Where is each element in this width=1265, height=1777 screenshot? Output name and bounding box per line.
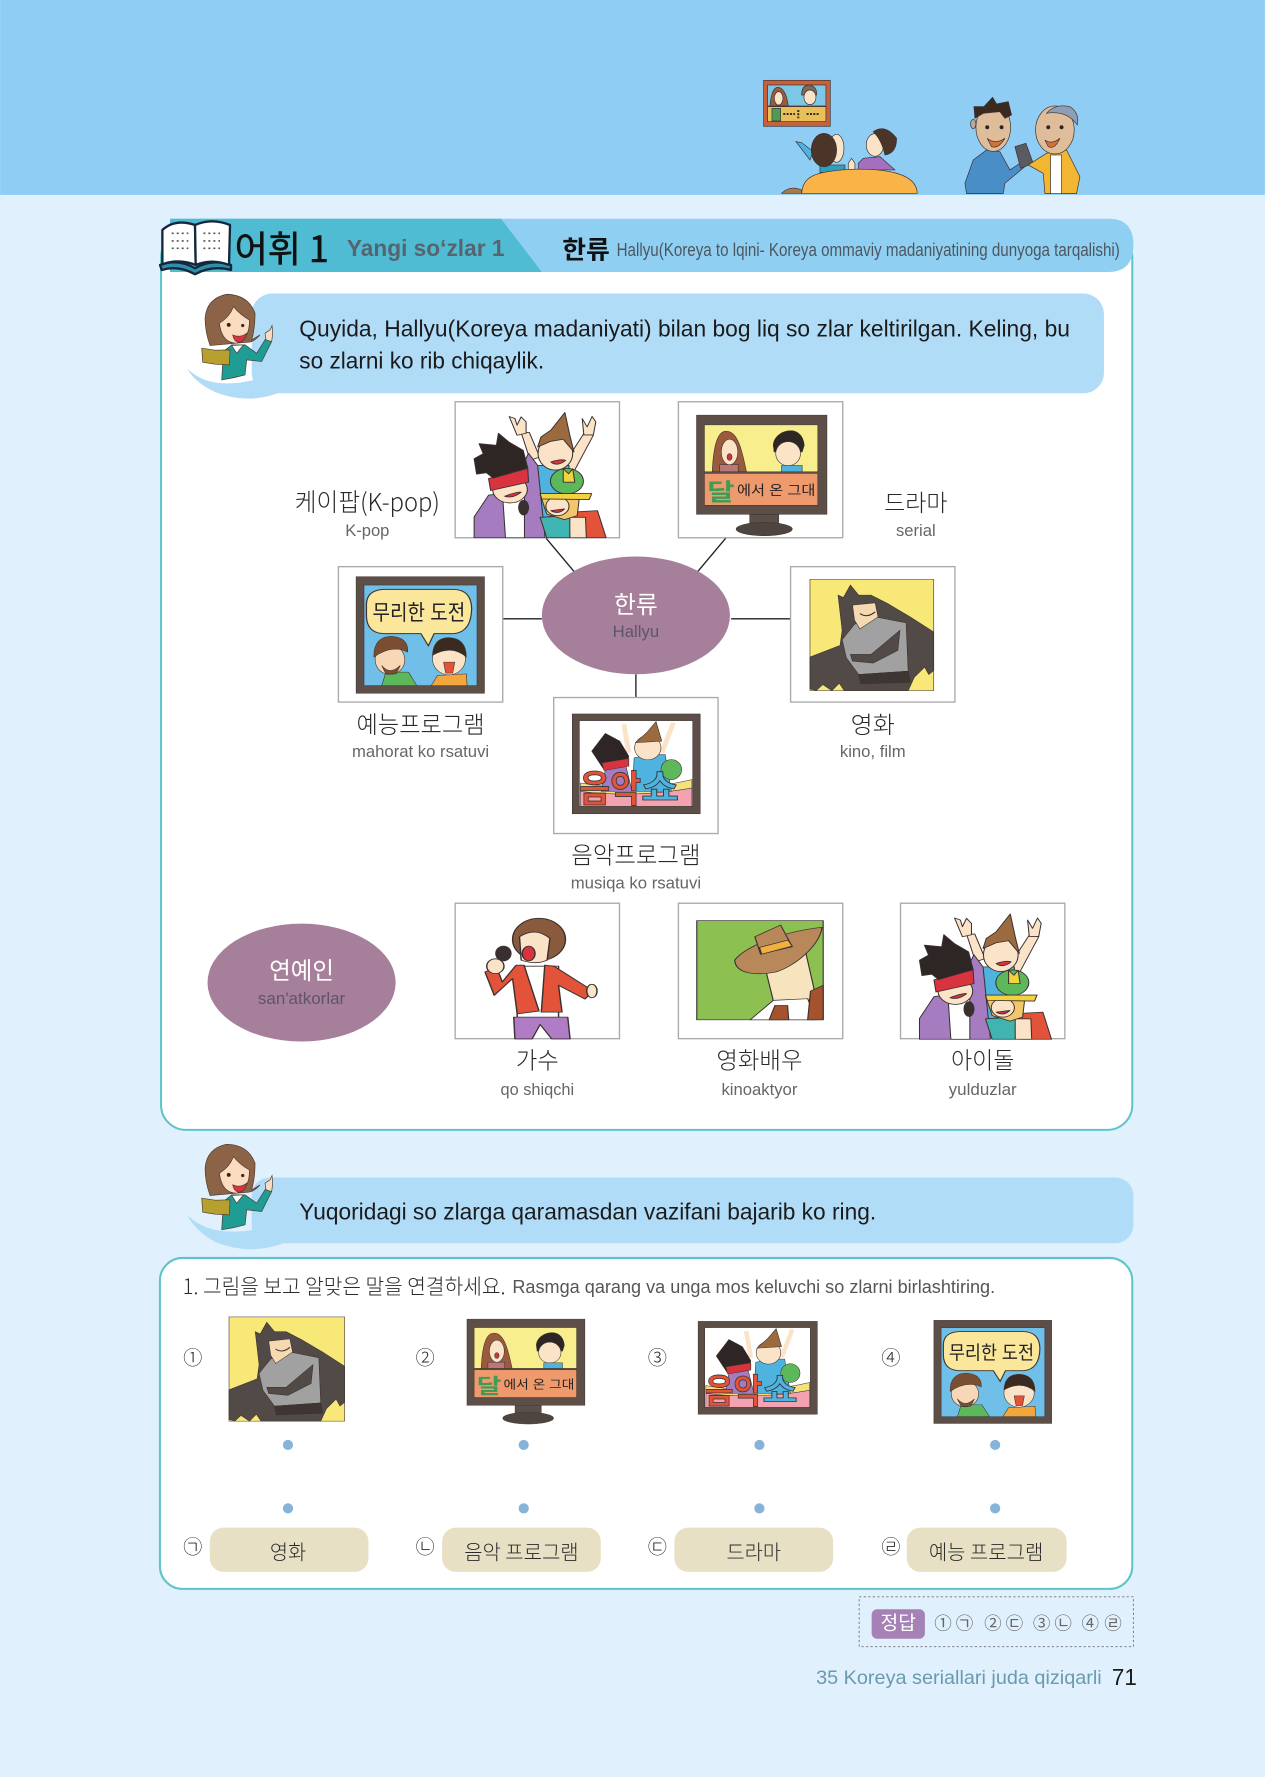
instruction text: Yuqoridagi so zlarga qaramasdan vazifani bajarib ko ring.	[299, 1198, 876, 1224]
node: music show	[554, 698, 718, 892]
icon: open book	[160, 221, 231, 274]
node: music show: 음악	[579, 768, 641, 810]
heading: vocabulary 1: 어휘 1	[235, 221, 329, 273]
picture 3: music show: 음악	[705, 1373, 762, 1411]
panel: matching exercise	[160, 1258, 1132, 1589]
answer option: variety show: ㉣	[881, 1532, 901, 1560]
node: drama: serial	[896, 521, 936, 540]
icon: teacher	[202, 1144, 273, 1230]
node: drama: 달	[707, 479, 735, 506]
footer: chapter title: 35 Koreya seriallari juda qiziqarli	[816, 1668, 1102, 1689]
answers: ㉣	[1104, 1614, 1122, 1634]
node: music show: musiqa ko rsatuvi	[571, 874, 701, 893]
center node: hallyu: Hallyu	[613, 622, 659, 641]
answers	[934, 1614, 1122, 1634]
card: film actor: 영화배우	[716, 1042, 802, 1076]
answer option: music show: ㉡	[415, 1532, 435, 1560]
center node: hallyu: 한류	[614, 592, 658, 619]
category node: entertainers: san'atkorlar	[258, 989, 346, 1008]
exercise question translation: Rasmga qarang va unga mos keluvchi so zlarni birlashtiring.	[512, 1276, 995, 1297]
top banner with illustrations	[0, 0, 1265, 195]
picture 4: variety show	[881, 1320, 1052, 1423]
answer option: drama: 드라마	[727, 1535, 781, 1565]
heading: new words 1: Yangi so‘zlar 1	[347, 235, 504, 261]
node: movie: 영화	[851, 706, 895, 740]
footer: page number: 71	[1112, 1664, 1137, 1690]
card: film actor: kinoaktyor	[721, 1080, 798, 1099]
node: variety show	[338, 567, 503, 761]
card: idol	[901, 903, 1065, 1099]
speech bubble: task instruction	[187, 1144, 1133, 1249]
picture 2: drama: 달	[477, 1375, 501, 1399]
panel: vocabulary	[160, 219, 1133, 1130]
node: variety show: mahorat ko rsatuvi	[352, 742, 489, 761]
answer key box	[859, 1597, 1133, 1647]
answers: ④	[1082, 1614, 1099, 1634]
node: k-pop	[295, 402, 619, 540]
answer label: 정답	[881, 1613, 916, 1635]
illustration: family watching TV	[764, 80, 1080, 194]
exercise question: 1. 그림을 보고 알맞은 말을 연결하세요.	[183, 1271, 506, 1301]
node: k-pop: 케이팝(K-pop)	[295, 483, 440, 519]
node: drama	[678, 402, 948, 540]
card: singer: 가수	[516, 1042, 559, 1076]
answer option: movie: ㉠	[183, 1532, 202, 1560]
node: variety show: 예능프로그램	[357, 705, 485, 740]
card: film actor	[678, 903, 843, 1099]
picture 2: drama	[415, 1319, 585, 1424]
picture 2: drama: ②	[415, 1342, 435, 1370]
card: idol: 아이돌	[951, 1042, 1014, 1076]
node: movie	[791, 567, 955, 761]
node: music show: 음악프로그램	[571, 836, 700, 871]
answer option: music show: 음악 프로그램	[464, 1535, 579, 1565]
node: movie: kino, film	[840, 742, 906, 761]
answer option: movie: 영화	[270, 1535, 306, 1565]
header bar	[160, 219, 1133, 274]
heading: hallyu: 한류	[562, 236, 610, 264]
node: music show: 쇼	[641, 768, 679, 809]
answers: ㉢	[1006, 1614, 1023, 1634]
answers: ③	[1033, 1614, 1050, 1634]
picture 3: music show	[648, 1321, 817, 1414]
picture 2: drama: 에서 온 그대	[504, 1378, 574, 1391]
answers: ㉠	[956, 1614, 973, 1634]
answer option: variety show: 예능 프로그램	[929, 1535, 1043, 1565]
category node: entertainers: 연예인	[269, 958, 334, 985]
speech bubble: intro	[187, 294, 1104, 399]
card: idol: yulduzlar	[949, 1080, 1017, 1099]
card: singer	[455, 903, 619, 1099]
intro text: Quyida, Hallyu(Koreya madaniyati) bilan bog liq so zlar keltirilgan. Keling, bu	[299, 316, 1070, 342]
category node: entertainers	[208, 924, 396, 1041]
answer option: drama: ㉢	[648, 1532, 667, 1560]
answer option: movie	[183, 1528, 368, 1572]
connector lines	[502, 537, 790, 697]
intro text: so zlarni ko rib chiqaylik.	[299, 347, 544, 373]
hallyu definition: Hallyu(Koreya to lqini- Koreya ommaviy madaniyatining dunyoga tarqalishi)	[617, 240, 1120, 260]
icon: teacher	[202, 294, 273, 380]
answer option: drama	[648, 1528, 833, 1572]
node: variety show: 무리한 도전	[372, 602, 465, 626]
answers: ①	[934, 1614, 952, 1634]
node: drama: 에서 온 그대	[737, 483, 815, 498]
answer option: music show	[415, 1528, 601, 1572]
picture 3: music show: ③	[648, 1342, 667, 1370]
picture 3: music show: 쇼	[762, 1373, 798, 1410]
card: singer: qo shiqchi	[500, 1080, 574, 1099]
answers: ②	[984, 1614, 1002, 1634]
answer label	[872, 1609, 925, 1639]
answer option: variety show	[881, 1528, 1067, 1572]
matching dots	[283, 1440, 1000, 1514]
center node: hallyu	[542, 556, 730, 674]
node: drama: 드라마	[884, 484, 948, 518]
picture 4: variety show: ④	[881, 1342, 901, 1370]
node: k-pop: K-pop	[345, 521, 389, 540]
picture 1: movie: ①	[183, 1342, 202, 1370]
answers: ㉡	[1054, 1614, 1072, 1634]
picture 4: variety show: 무리한 도전	[949, 1341, 1034, 1363]
picture 1: movie	[183, 1317, 345, 1421]
